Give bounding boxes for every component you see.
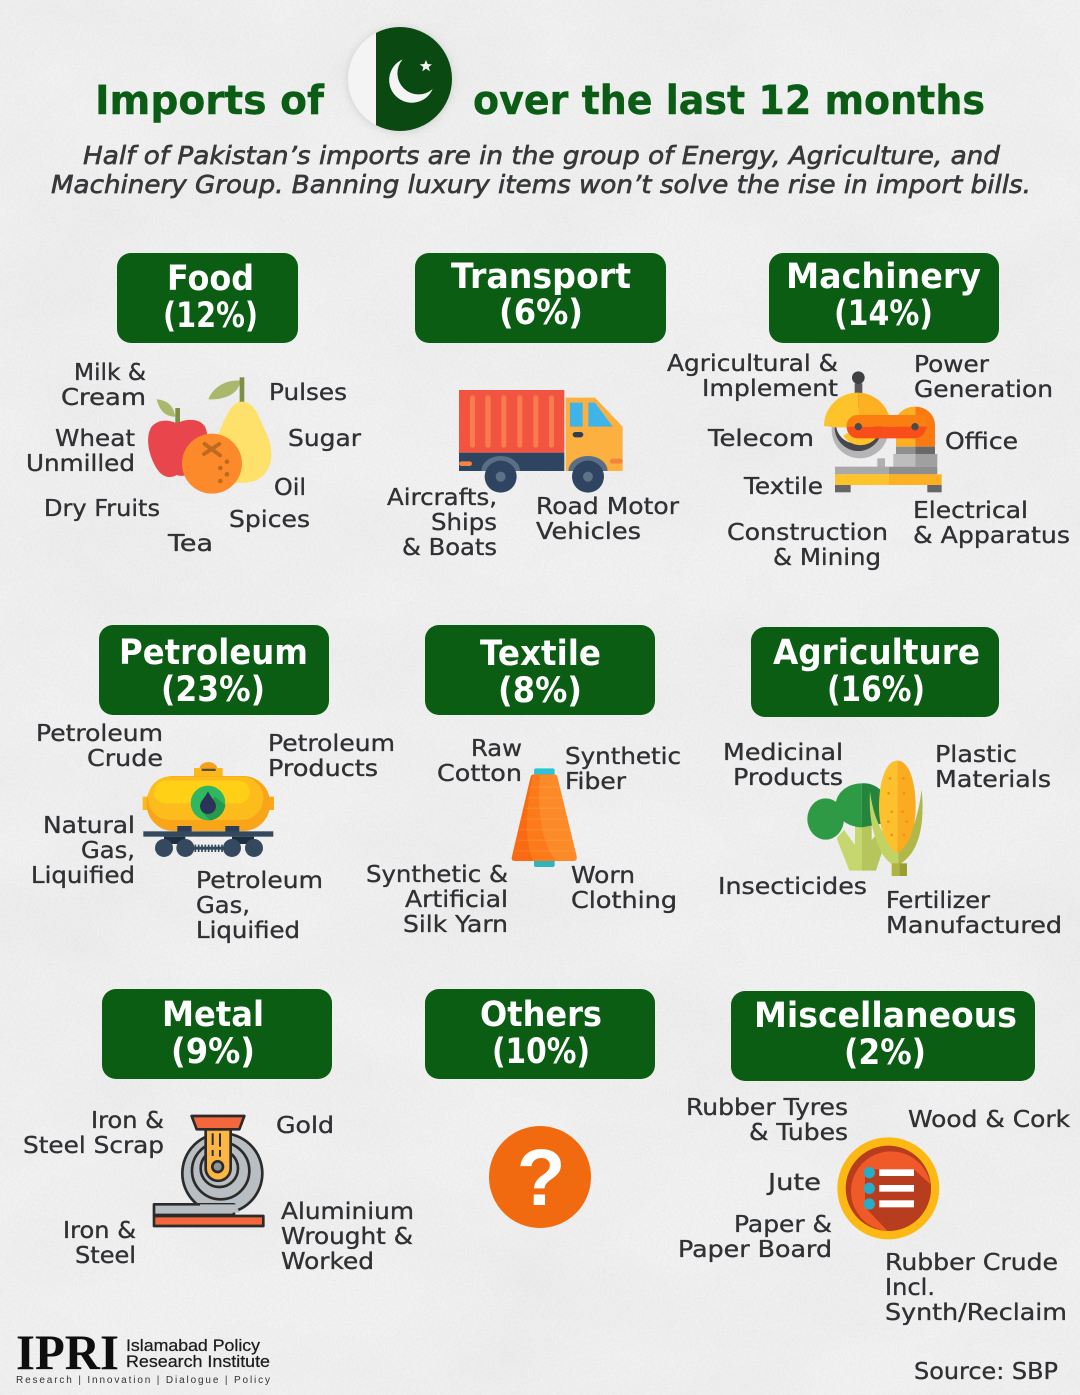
heading: agriculture: Agriculture [773, 633, 980, 673]
labels: textile [366, 736, 681, 938]
panel: metal [23, 989, 414, 1275]
labels: textile: Artificial [405, 887, 508, 913]
heading: textile: Textile [480, 634, 601, 674]
labels: agriculture: Insecticides [718, 874, 867, 900]
labels: transport: Road Motor [536, 494, 680, 520]
labels: food: Tea [167, 531, 213, 557]
panel: miscellaneous [678, 991, 1071, 1326]
icon: question mark [489, 1126, 591, 1228]
labels: machinery: Textile [743, 474, 823, 500]
title: over the last 12 months [473, 78, 985, 124]
labels: textile: Cotton [437, 761, 522, 787]
heading: machinery: Machinery [786, 257, 981, 297]
labels: metal: Gold [276, 1113, 334, 1139]
logo: IPRI: Research | Innovation | Dialogue | Policy [16, 1375, 270, 1386]
labels: miscellaneous: Synth/Reclaim [885, 1300, 1067, 1326]
labels: machinery: & Apparatus [913, 523, 1070, 549]
heading: metal: Metal [162, 995, 264, 1035]
heading: miscellaneous [731, 991, 1035, 1081]
panel: agriculture [718, 627, 1062, 939]
heading: agriculture [751, 627, 999, 717]
heading: transport: Transport [451, 257, 631, 297]
heading: petroleum [99, 625, 329, 715]
labels: textile: Fiber [565, 769, 627, 795]
heading: miscellaneous: Miscellaneous [754, 996, 1017, 1036]
panel: transport [387, 253, 680, 561]
heading: others: Others [480, 995, 602, 1035]
icon: oil tanker wagon [143, 762, 274, 857]
labels: machinery: Power [914, 352, 990, 378]
labels: machinery: Generation [914, 377, 1053, 403]
labels: petroleum [31, 721, 395, 944]
icon: fruit [148, 377, 271, 494]
labels: agriculture: Medicinal [723, 740, 843, 766]
labels: machinery: & Mining [773, 545, 881, 571]
labels: petroleum: Petroleum [36, 721, 163, 747]
labels: textile: Synthetic & [366, 862, 508, 888]
logo: IPRI: Islamabad Policy [126, 1336, 261, 1355]
labels: food: Oil [274, 475, 306, 501]
labels: petroleum: Petroleum [196, 868, 323, 894]
labels: textile: Synthetic [565, 744, 681, 770]
labels: machinery [667, 351, 1070, 571]
heading: food [117, 253, 298, 343]
heading: metal [102, 989, 332, 1079]
labels: agriculture: Materials [935, 767, 1051, 793]
subtitle: Half of Pakistan’s imports are in the group of Energy, Agriculture, and [83, 141, 1000, 170]
labels: transport: Ships [431, 510, 497, 536]
labels: machinery: Implement [702, 376, 838, 402]
labels: food: Spices [229, 507, 310, 533]
panel: others [425, 989, 655, 1228]
labels: agriculture: Products [733, 765, 843, 791]
labels: metal: Iron & [63, 1218, 136, 1244]
labels: miscellaneous: Rubber Crude [885, 1250, 1058, 1276]
labels: petroleum: Liquified [31, 863, 135, 889]
labels: metal: Aluminium [281, 1199, 414, 1225]
icon: broccoli and corn [807, 761, 923, 876]
labels: metal: Steel [75, 1243, 136, 1269]
panel: petroleum [31, 625, 395, 944]
labels: food [26, 360, 362, 557]
logo: IPRI [16, 1324, 270, 1386]
labels: metal: Iron & [91, 1108, 164, 1134]
logo: IPRI: IPRI [16, 1324, 119, 1380]
labels: agriculture: Manufactured [886, 913, 1062, 939]
labels: miscellaneous: & Tubes [749, 1120, 848, 1146]
heading: others: (10%) [492, 1032, 590, 1072]
labels: metal: Worked [281, 1249, 374, 1275]
labels: petroleum: Gas, [81, 838, 135, 864]
labels: food: Unmilled [26, 451, 135, 477]
heading: petroleum: Petroleum [119, 633, 308, 673]
labels: food: Dry Fruits [44, 496, 160, 522]
labels: textile: Worn [571, 863, 635, 889]
heading: metal: (9%) [171, 1032, 255, 1072]
icon: list badge [837, 1137, 939, 1239]
labels: machinery: Agricultural & [667, 351, 838, 377]
labels: miscellaneous: Paper Board [678, 1237, 832, 1263]
heading: food: Food [167, 259, 254, 299]
icon: metal roll [154, 1116, 263, 1226]
icon: Pakistan flag [346, 26, 454, 134]
source: Source: SBP [914, 1359, 1058, 1385]
labels: textile: Silk Yarn [403, 912, 508, 938]
labels: petroleum: Crude [87, 746, 163, 772]
panel: textile [366, 625, 681, 938]
subtitle [51, 141, 1031, 199]
labels: miscellaneous [678, 1095, 1071, 1326]
heading: agriculture: (16%) [827, 670, 925, 710]
labels: metal: Steel Scrap [23, 1133, 164, 1159]
labels: metal: Wrought & [281, 1224, 413, 1250]
icon: question mark: ? [517, 1133, 565, 1222]
heading: textile [425, 625, 655, 715]
labels: transport: Vehicles [536, 519, 641, 545]
labels: food: Milk & [74, 360, 146, 386]
heading: food: (12%) [163, 296, 258, 336]
labels: food: Cream [61, 385, 146, 411]
labels: textile: Raw [471, 736, 522, 762]
labels: food: Wheat [55, 426, 135, 452]
heading: transport [415, 253, 666, 343]
labels: petroleum: Products [268, 756, 378, 782]
labels: transport: & Boats [402, 535, 497, 561]
labels: machinery: Office [945, 429, 1018, 455]
logo: IPRI: Research Institute [126, 1352, 270, 1371]
labels: miscellaneous: Paper & [734, 1212, 832, 1238]
heading: miscellaneous: (2%) [844, 1033, 926, 1073]
title: Imports of [95, 78, 325, 124]
labels: metal [23, 1108, 414, 1275]
labels: textile: Clothing [571, 888, 677, 914]
labels: miscellaneous: Wood & Cork [908, 1107, 1071, 1133]
panel: food [26, 253, 362, 557]
labels: miscellaneous: Incl. [885, 1275, 935, 1301]
labels: petroleum: Natural [43, 813, 135, 839]
labels: agriculture: Fertilizer [886, 888, 991, 914]
icon: cutting machine [824, 371, 942, 492]
labels: miscellaneous: Rubber Tyres [686, 1095, 848, 1121]
labels: transport [387, 485, 680, 561]
icon: truck [459, 390, 623, 493]
heading: machinery: (14%) [834, 294, 933, 334]
title [95, 78, 985, 124]
labels: petroleum: Petroleum [268, 731, 395, 757]
heading: others [425, 989, 655, 1079]
labels: miscellaneous: Jute [766, 1170, 821, 1196]
icon: thread cone [512, 768, 577, 867]
labels: transport: Aircrafts, [387, 485, 497, 511]
heading: machinery [769, 253, 999, 343]
panel: machinery [667, 253, 1070, 571]
labels: agriculture [718, 740, 1062, 939]
labels: agriculture: Plastic [935, 742, 1017, 768]
heading: petroleum: (23%) [161, 670, 265, 710]
labels: petroleum: Liquified [196, 918, 300, 944]
heading: textile: (8%) [498, 671, 582, 711]
labels: machinery: Construction [727, 520, 888, 546]
subtitle: Machinery Group. Banning luxury items won’t solve the rise in import bills. [51, 170, 1031, 199]
labels: machinery: Electrical [913, 498, 1028, 524]
labels: food: Sugar [288, 426, 362, 452]
labels: petroleum: Gas, [196, 893, 250, 919]
labels: food: Pulses [269, 380, 347, 406]
heading: transport: (6%) [499, 293, 583, 333]
labels: machinery: Telecom [707, 426, 814, 452]
